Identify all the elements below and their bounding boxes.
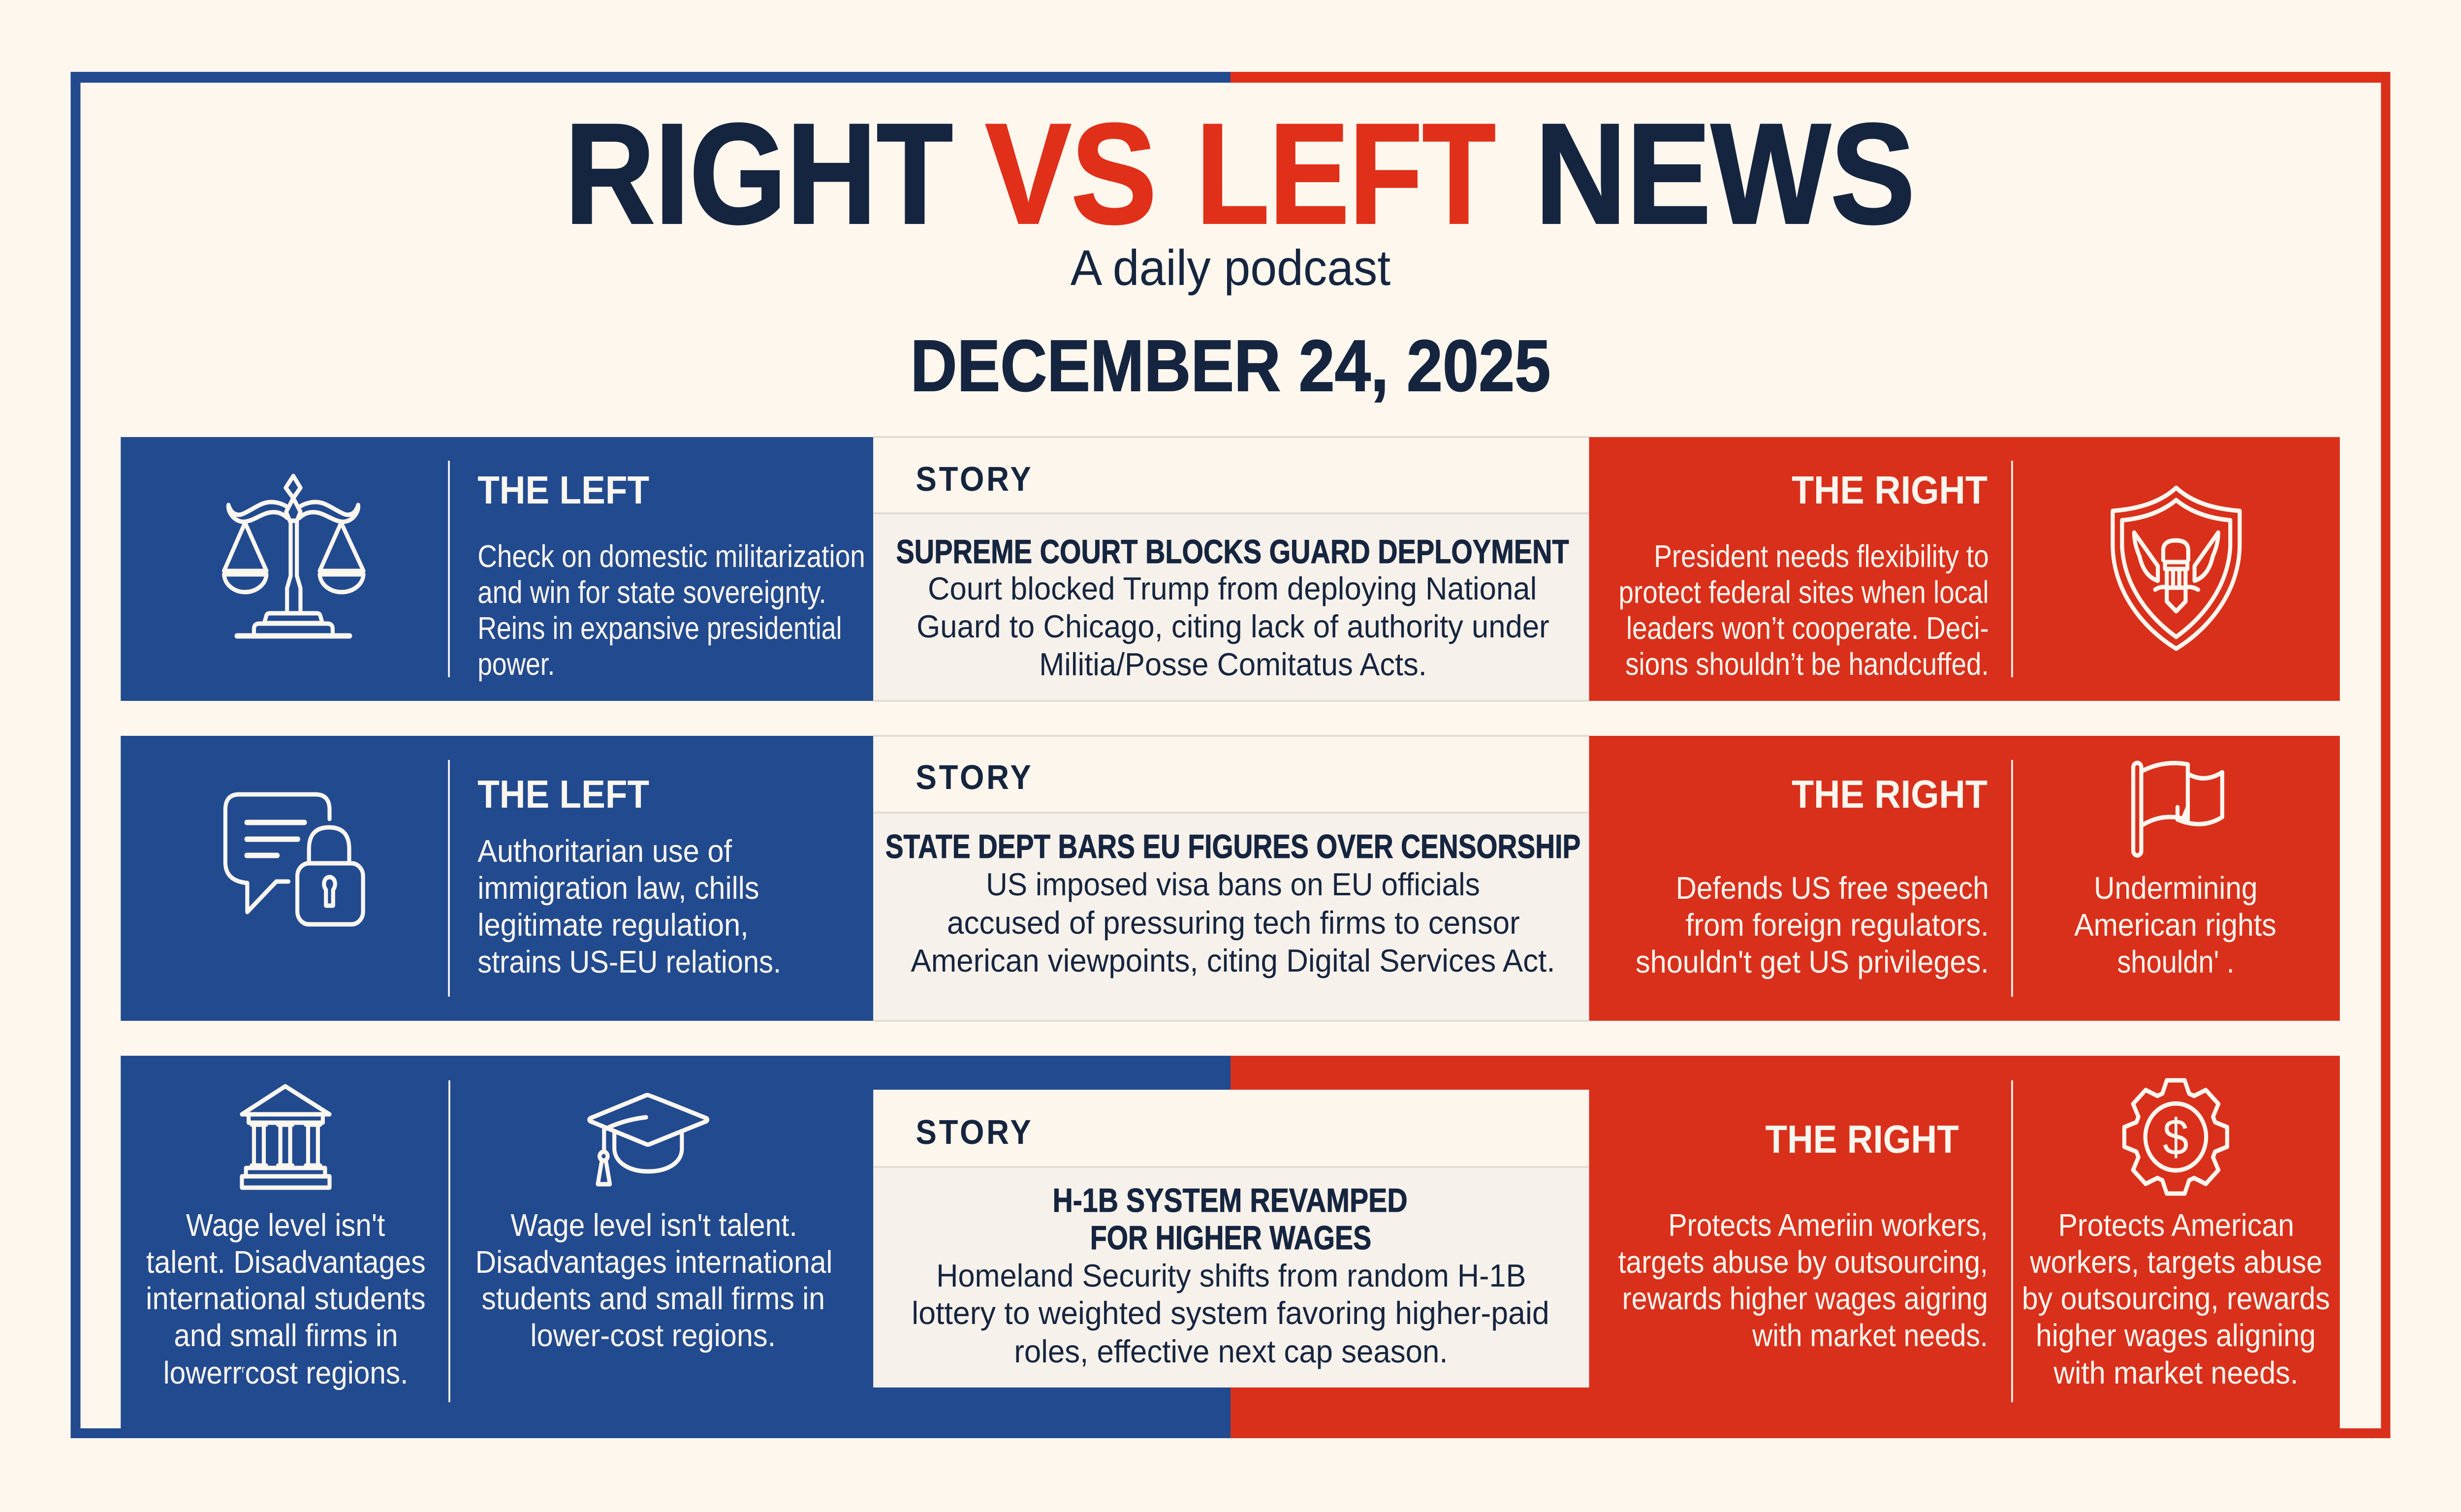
heading: the right: THE RIGHT [1765,1117,1959,1161]
text: right view first column: rewards higher wages aigring [1622,1281,1988,1316]
text: right view first column: targets abuse by outsourcing, [1618,1244,1988,1280]
text: left view [477,833,781,979]
text: left view first column [146,1207,426,1390]
text: left view second column: lower-cost regions. [530,1318,776,1353]
row 2 [121,735,2340,1022]
text: left view first column: Wage level isn't [186,1207,385,1243]
text: right view: shouldn't get US privileges. [1636,944,1989,979]
text: left view second column: students and small firms in [481,1281,825,1316]
text: right view: Defends US free speech [1676,870,1989,906]
heading: the right: THE RIGHT [1792,468,1988,512]
text: left view first column: and small firms in [174,1318,398,1353]
text: story summary: Militia/Posse Comitatus Acts. [1039,646,1427,682]
text: right view first column [1618,1207,1988,1353]
heading: story: STORY [915,758,1031,796]
text: story summary: lottery to weighted system favoring higher-paid [912,1295,1549,1331]
text: story summary: American viewpoints, citing Digital Services Act. [911,943,1555,978]
text: story summary [911,866,1555,978]
text: right view second column [2022,1207,2330,1390]
text: right view first column: Protects Ameriin workers, [1668,1207,1988,1243]
heading: story: STORY [915,460,1031,498]
text: right view [1619,538,1989,682]
text: story summary: Guard to Chicago, citing lack of authority under [916,608,1549,644]
headline: H-1B SYSTEM REVAMPED [1052,1182,1408,1219]
text: story summary: US imposed visa bans on EU officials [986,866,1480,902]
icon: gear with dollar sign [2124,1080,2227,1194]
text: left view second column: Disadvantages international [475,1244,832,1280]
text: left view: strains US-EU relations. [477,944,781,979]
headline: FOR HIGHER WAGES [1090,1219,1371,1257]
text: right view second column: workers, targets abuse [2029,1244,2322,1280]
heading: story: STORY [915,1113,1031,1151]
text: right view second column: with market needs. [2053,1355,2298,1390]
text: right view second column: Protects American [2058,1207,2294,1243]
text: right view: leaders won’t cooperate. Deci- [1626,610,1989,646]
panel: row 2 story [873,735,1589,1022]
title: LEFT [1196,94,1496,253]
text: left view: Check on domestic militarization [477,538,865,574]
icon: speech bubble with padlock [225,794,363,924]
title: RIGHT [565,94,953,253]
icon: scales of justice [224,476,364,636]
headline [1052,1182,1408,1257]
heading: the left: THE LEFT [477,772,649,816]
text: left view first column: international students [146,1281,426,1316]
icon: government building [242,1086,330,1188]
text: story summary: Court blocked Trump from deploying National [928,570,1537,606]
panel: row 3 right [1230,1056,2340,1428]
row 1 [121,436,2340,702]
heading: the right: THE RIGHT [1792,772,1988,816]
text: right view: protect federal sites when local [1619,574,1989,610]
title [565,94,1915,253]
icon: gear with dollar sign: $ [2163,1109,2189,1166]
text: right view second column: higher wages aligning [2036,1318,2316,1353]
text: left view: Reins in expansive presidential [477,610,842,646]
panel: row 2 left [121,736,873,1021]
panel: row 1 right [1589,437,2340,701]
text: right view second column: Undermining [2094,870,2258,906]
text: left view: legitimate regulation, [477,907,749,943]
text: left view: Authoritarian use of [477,833,732,869]
text: left view second column [475,1207,832,1353]
headline: SUPREME COURT BLOCKS GUARD DEPLOYMENT [896,533,1569,570]
title: VS [985,94,1157,253]
panel: row 2 right [1589,736,2340,1021]
text: story summary [912,1258,1549,1369]
panel: row 1 story [873,436,1589,702]
text: right view: sions shouldn’t be handcuffed. [1625,646,1989,682]
text: left view [477,538,865,682]
text: left view: immigration law, chills [477,870,759,906]
text: left view: and win for state sovereignty. [477,574,826,610]
text: story summary [916,570,1549,682]
heading: the left: THE LEFT [477,468,649,512]
text: right view: President needs flexibility to [1654,538,1989,574]
text: right view: from foreign regulators. [1686,907,1989,943]
panel: row 3 left [121,1056,1230,1428]
icon: graduation cap [589,1095,707,1184]
headline: STATE DEPT BARS EU FIGURES OVER CENSORSHIP [885,828,1580,865]
text: right view second column: American rights [2074,907,2276,943]
icon: shield with eagle [2113,488,2240,649]
panel: row 3 story [873,1090,1589,1387]
text: left view first column: r [242,1363,245,1375]
text: story summary: Homeland Security shifts from random H-1B [936,1258,1526,1293]
row 3 [121,1056,2340,1428]
title: NEWS [1535,94,1915,253]
text: story summary: roles, effective next cap season. [1014,1333,1448,1369]
text: left view first column: cost regions. [245,1355,408,1390]
date: DECEMBER 24, 2025 [911,325,1550,407]
text: left view first column: lowerr [163,1355,241,1390]
text: right view [1636,870,1989,979]
panel: row 1 left [121,437,873,701]
text: left view: power. [477,646,555,682]
subtitle: A daily podcast [1071,240,1390,296]
icon: flag [2133,763,2222,855]
text: right view second column: shouldn' . [2117,944,2234,979]
text: left view first column: talent. Disadvantages [146,1244,426,1280]
text: story summary: accused of pressuring tech firms to censor [947,905,1520,941]
text: right view second column [2074,870,2276,979]
text: left view second column: Wage level isn't talent. [510,1207,797,1243]
text: right view first column: with market needs. [1752,1318,1988,1353]
text: right view second column: by outsourcing, rewards [2022,1281,2330,1316]
